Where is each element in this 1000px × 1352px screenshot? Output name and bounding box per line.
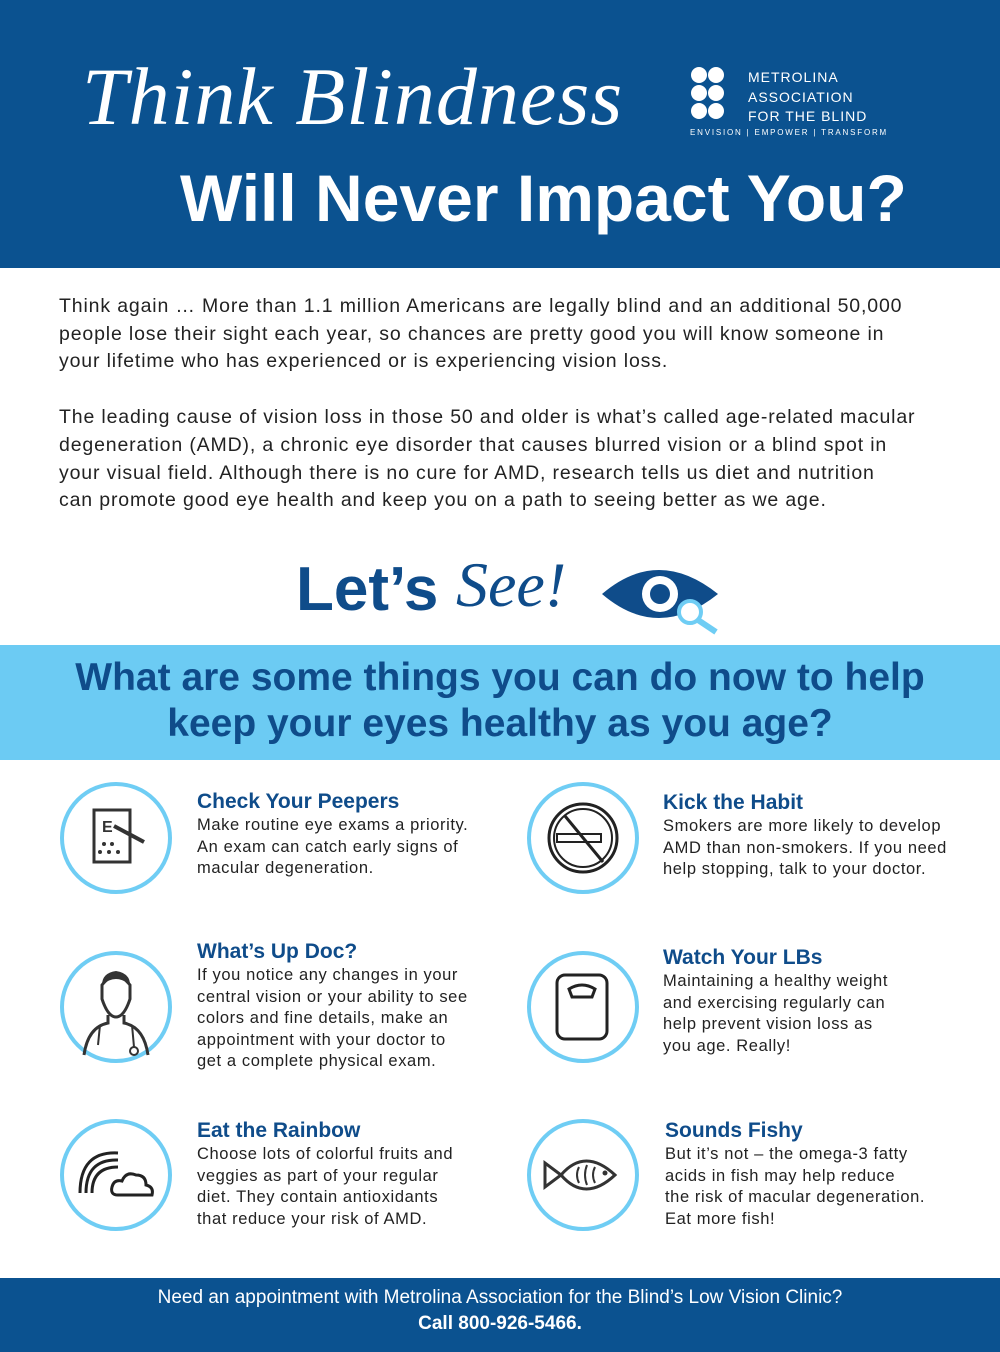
item: what's up doc: What’s Up Doc?	[197, 940, 357, 963]
intro text: can promote good eye health and keep you on a path to seeing better as we age.	[59, 489, 827, 511]
logo	[690, 67, 888, 137]
icon: eye chart: E	[102, 819, 113, 836]
item: what's up doc: get a complete physical exam.	[197, 1052, 436, 1070]
item: kick the habit: AMD than non-smokers. If you need	[663, 838, 947, 856]
item: sounds fishy: Eat more fish!	[665, 1210, 775, 1228]
band question: keep your eyes healthy as you age?	[167, 702, 833, 745]
logo: ENVISION | EMPOWER | TRANSFORM	[690, 128, 888, 137]
icon: no smoking	[527, 782, 639, 894]
item: check your peepers: An exam can catch early signs of	[197, 838, 458, 856]
item: watch your lbs: you age. Really!	[663, 1036, 791, 1054]
item: watch your lbs: Watch Your LBs	[663, 946, 822, 969]
footer	[0, 1278, 1000, 1352]
item: eat the rainbow: Eat the Rainbow	[197, 1119, 360, 1142]
item: kick the habit: help stopping, talk to your doctor.	[663, 860, 926, 878]
item: sounds fishy: But it’s not – the omega-3 fatty	[665, 1145, 908, 1163]
icon: fish	[527, 1119, 639, 1231]
item: sounds fishy: Sounds Fishy	[665, 1119, 803, 1142]
item: what's up doc: colors and fine details, make an	[197, 1009, 448, 1027]
logo: METROLINA	[748, 69, 839, 85]
intro text: people lose their sight each year, so chances are pretty good you will know someone in	[59, 323, 884, 345]
item: eat the rainbow	[197, 1119, 453, 1228]
item: kick the habit: Smokers are more likely to develop	[663, 817, 941, 835]
let's see heading: See!	[456, 549, 566, 620]
item: what's up doc	[197, 940, 468, 1070]
footer: Need an appointment with Metrolina Association for the Blind’s Low Vision Clinic?	[158, 1287, 842, 1308]
item: sounds fishy	[665, 1119, 925, 1228]
intro text	[59, 295, 915, 511]
intro text: your lifetime who has experienced or is experiencing vision loss.	[59, 350, 668, 372]
let's see heading: Let’s	[296, 555, 438, 624]
item: watch your lbs: help prevent vision loss as	[663, 1015, 873, 1033]
item: watch your lbs: and exercising regularly can	[663, 994, 885, 1012]
footer: Call 800-926-5466.	[418, 1313, 582, 1334]
logo: ASSOCIATION	[748, 88, 854, 104]
item: check your peepers	[197, 790, 468, 877]
item: sounds fishy: the risk of macular degeneration.	[665, 1188, 925, 1206]
item: watch your lbs	[663, 946, 888, 1054]
item: check your peepers: macular degeneration.	[197, 859, 374, 877]
item: kick the habit	[663, 791, 947, 878]
item: eat the rainbow: diet. They contain antioxidants	[197, 1188, 438, 1206]
icon: rainbow	[60, 1119, 172, 1231]
band question: What are some things you can do now to help	[75, 656, 925, 699]
item: what's up doc: central vision or your ability to see	[197, 988, 468, 1006]
item: check your peepers: Check Your Peepers	[197, 790, 399, 813]
intro text: The leading cause of vision loss in those 50 and older is what’s called age-related macular	[59, 406, 915, 428]
icon: eye chart	[60, 782, 172, 894]
band question	[0, 645, 1000, 760]
let's see heading	[296, 549, 718, 634]
header banner	[0, 0, 1000, 268]
item: watch your lbs: Maintaining a healthy weight	[663, 972, 888, 990]
item: what's up doc: If you notice any changes in your	[197, 966, 458, 984]
logo: FOR THE BLIND	[748, 108, 867, 124]
item: eat the rainbow: veggies as part of your regular	[197, 1166, 438, 1184]
intro text: Think again … More than 1.1 million Americans are legally blind and an additional 50,000	[59, 295, 902, 317]
icon: doctor	[60, 951, 172, 1063]
item: eat the rainbow: that reduce your risk of AMD.	[197, 1210, 427, 1228]
item: sounds fishy: acids in fish may help reduce	[665, 1166, 895, 1184]
item: kick the habit: Kick the Habit	[663, 791, 803, 814]
item: what's up doc: appointment with your doctor to	[197, 1030, 446, 1048]
icon: eye with magnifier	[602, 570, 718, 634]
main title: Will Never Impact You?	[180, 161, 907, 235]
item: check your peepers: Make routine eye exams a priority.	[197, 816, 468, 834]
intro text: your visual field. Although there is no cure for AMD, research tells us diet and nutrition	[59, 462, 875, 484]
icon: scale	[527, 951, 639, 1063]
intro text: degeneration (AMD), a chronic eye disorder that causes blurred vision or a blind spot in	[59, 434, 887, 456]
script title: Think Blindness	[82, 51, 623, 142]
item: eat the rainbow: Choose lots of colorful fruits and	[197, 1145, 453, 1163]
